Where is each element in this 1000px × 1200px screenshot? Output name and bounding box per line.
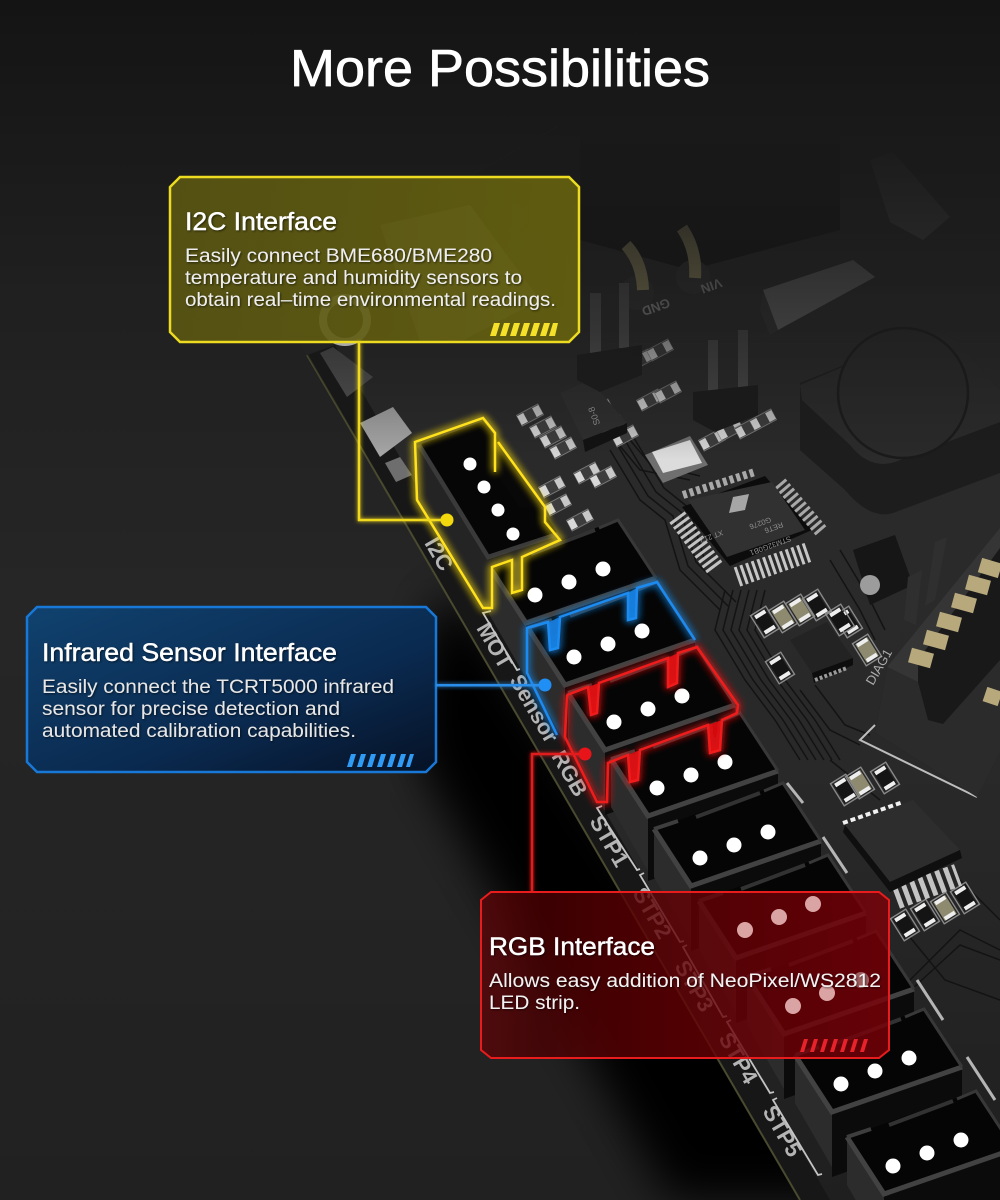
board silkscreen labels: STP3 <box>670 956 719 1016</box>
microcontroller markings: STM32G0B1 <box>749 534 792 557</box>
RGB description: LED strip. <box>489 993 580 1014</box>
infrared description: Easily connect the TCRT5000 infrared <box>42 677 394 698</box>
panel: I2C interface <box>170 177 579 342</box>
RGB heading: RGB Interface <box>489 933 655 961</box>
USB and switch <box>320 347 412 482</box>
board silkscreen labels: STP1 <box>585 811 634 871</box>
module under yellow panel <box>323 205 540 342</box>
STM32 microcontroller <box>677 472 822 577</box>
microcontroller logo <box>729 494 749 513</box>
infrared description: sensor for precise detection and <box>42 699 340 720</box>
pin header with capacitor <box>853 535 947 688</box>
fuse two <box>870 152 950 240</box>
pins seen through the panel <box>737 896 869 1014</box>
board silkscreen labels: MOT <box>472 618 518 673</box>
infrared heading: Infrared Sensor Interface <box>42 639 337 667</box>
I2C pins <box>464 458 520 540</box>
terminal block and pins <box>577 125 840 432</box>
lower chip <box>843 800 962 898</box>
inductor <box>800 328 1000 514</box>
board silkscreen labels <box>420 533 807 1161</box>
connector rows <box>489 520 1000 1200</box>
red tabs <box>588 653 722 782</box>
blue tabs <box>549 588 637 650</box>
I2C description <box>185 246 556 311</box>
I2C description: Easily connect BME680/BME280 <box>185 246 492 267</box>
I2C heading: I2C Interface <box>185 208 337 236</box>
label band <box>307 345 830 1200</box>
board silkscreen labels: I2C <box>420 533 458 575</box>
microcontroller markings: XT 212 <box>699 528 724 545</box>
silkscreen brackets <box>483 611 822 1175</box>
title: More Possibilities <box>290 40 710 98</box>
red connector outline: RGB <box>565 647 738 802</box>
panel: infrared sensor interface <box>27 607 436 772</box>
infrared stripes <box>347 754 414 767</box>
board silkscreen labels: STP2 <box>628 883 677 943</box>
circuit board <box>306 225 1000 1200</box>
leader line: infrared <box>436 678 552 692</box>
microcontroller markings: RET6 <box>763 520 784 535</box>
white strips along connector row <box>787 783 995 1100</box>
fuse <box>760 260 875 335</box>
I2C description: obtain real–time environmental readings. <box>185 290 556 311</box>
board edge <box>307 355 800 1200</box>
board silkscreen labels: STP5 <box>758 1101 807 1161</box>
RGB stripes <box>800 1039 868 1052</box>
RGB description: Allows easy addition of NeoPixel/WS2812 <box>489 971 881 992</box>
large black connector with gold pins <box>860 528 1000 797</box>
microcontroller markings <box>699 515 792 557</box>
RGB description <box>489 971 881 1014</box>
dimming fade <box>301 125 1000 450</box>
panel: RGB interface <box>481 892 889 1058</box>
SO-8 chip: S0-8 <box>586 405 602 427</box>
diag label: DIAG1 <box>863 646 895 688</box>
leader line: RGB <box>532 748 592 892</box>
microcontroller markings: G0276 <box>748 515 772 531</box>
yellow outline <box>415 418 560 608</box>
traces <box>610 434 1000 1060</box>
board shadow <box>412 590 860 1200</box>
yellow connector highlight: I2C <box>415 418 560 608</box>
terminal block and pins: VIN <box>699 275 724 297</box>
blue connector outline: sensor <box>527 582 695 735</box>
infrared description: automated calibration capabilities. <box>42 721 356 742</box>
board silkscreen labels: STP4 <box>714 1028 763 1089</box>
small chip <box>790 622 853 683</box>
SMD component clusters <box>517 339 980 941</box>
infrared description <box>42 677 394 742</box>
SO-8 chip <box>560 380 627 452</box>
board silkscreen labels: Sensor <box>505 670 564 747</box>
I2C stripes <box>490 323 558 336</box>
I2C description: temperature and humidity sensors to <box>185 268 522 289</box>
leader line: I2C <box>359 342 454 526</box>
crystal <box>645 436 708 483</box>
board silkscreen labels: RGB <box>547 746 593 801</box>
board markings: GND <box>640 295 672 319</box>
